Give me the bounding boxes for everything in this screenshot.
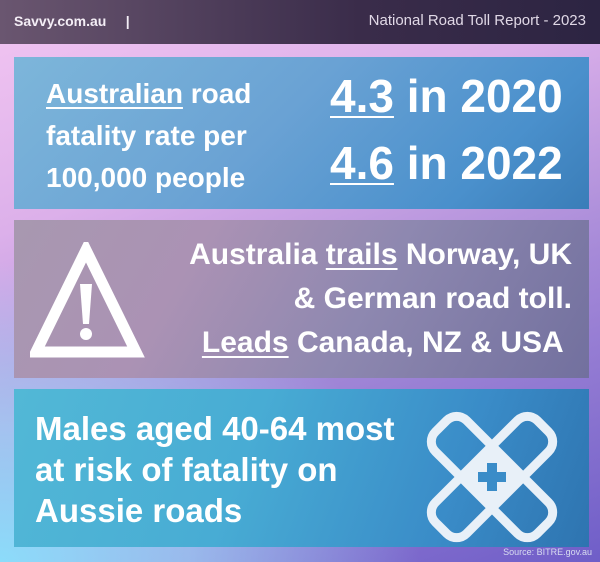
rate description: Australian road	[46, 78, 251, 109]
rate description	[46, 78, 251, 193]
rate description: fatality rate per	[46, 120, 247, 151]
risk text: Aussie roads	[35, 492, 242, 529]
rate values	[330, 70, 563, 189]
panel: international comparison	[14, 220, 589, 378]
source note: Source: BITRE.gov.au	[503, 547, 592, 557]
comparison text: Australia trails Norway, UK	[189, 238, 572, 271]
header brand: Savvy.com.au |	[14, 13, 130, 29]
rate description: 100,000 people	[46, 162, 245, 193]
header report title: National Road Toll Report - 2023	[369, 12, 586, 29]
panel: at-risk group	[14, 389, 589, 547]
comparison text: & German road toll.	[294, 282, 572, 315]
header bar	[0, 0, 600, 44]
panel: fatality rate	[14, 57, 589, 209]
risk text: Males aged 40-64 most	[35, 410, 394, 447]
rate values: 4.6 in 2022	[330, 137, 563, 189]
comparison text	[189, 238, 572, 359]
risk text: at risk of fatality on	[35, 451, 338, 488]
icon: warning triangle	[30, 242, 145, 358]
rate values: 4.3 in 2020	[330, 70, 563, 122]
risk text	[35, 410, 394, 529]
comparison text: Leads Canada, NZ & USA	[202, 326, 564, 359]
icon: bandage cross	[426, 412, 558, 542]
